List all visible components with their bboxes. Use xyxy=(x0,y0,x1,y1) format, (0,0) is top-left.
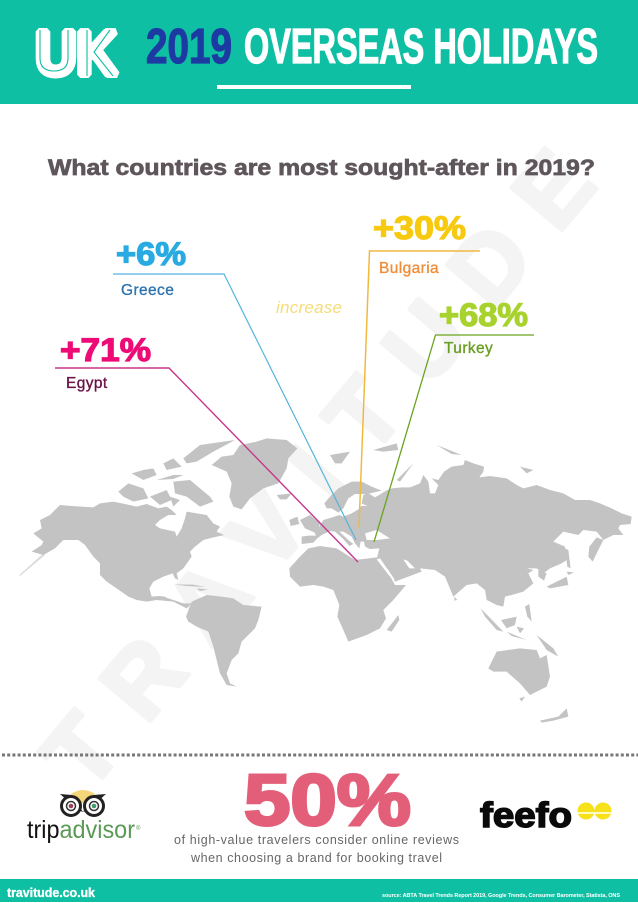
value: +6%: +6% xyxy=(116,236,186,272)
inland seas xyxy=(365,530,415,580)
label: Greece: Greece xyxy=(121,282,174,299)
value: +30%: +30% xyxy=(373,210,466,246)
logo: tripadvisor xyxy=(27,790,141,844)
map: Americas and Greenland xyxy=(19,438,297,687)
callout: Egypt xyxy=(55,332,358,562)
title year: 2019 xyxy=(146,20,232,74)
value: +68%: +68% xyxy=(439,297,528,333)
statistic description xyxy=(174,833,459,865)
statistic description: of high-value travelers consider online reviews xyxy=(174,833,459,847)
Africa xyxy=(289,546,406,642)
icon: owl xyxy=(60,790,106,816)
label: Turkey: Turkey xyxy=(444,340,493,357)
icon: yellow eyes xyxy=(577,802,612,820)
statistic description: when choosing a brand for booking travel xyxy=(190,851,442,865)
logo: feefo xyxy=(480,796,612,835)
statistic: 50%: 50% xyxy=(244,761,411,841)
title underline xyxy=(217,85,411,89)
question heading: What countries are most sought-after in 2019? xyxy=(48,155,595,180)
footer bar xyxy=(0,879,638,902)
callout: Turkey xyxy=(374,297,534,542)
UK logo: UK xyxy=(36,20,118,88)
website: travitude.co.uk xyxy=(7,886,95,900)
callout: Greece xyxy=(113,236,356,540)
watermark: TRAVITUDE: TRAVITUDE xyxy=(22,131,615,808)
caption: increase: increase xyxy=(276,298,342,317)
wordmark: feefo xyxy=(480,796,572,835)
value: +71%: +71% xyxy=(60,332,151,368)
wordmark: tripadvisor xyxy=(27,816,135,844)
label: Egypt: Egypt xyxy=(66,375,108,392)
callout: Bulgaria xyxy=(359,210,480,527)
world map xyxy=(19,438,632,723)
logo: tripadvisor: ® xyxy=(136,825,141,832)
map: Eurasia, Africa, Oceania xyxy=(289,443,632,723)
label: Bulgaria: Bulgaria xyxy=(379,260,439,277)
source note: source: ABTA Travel Trends Report 2019, Google Trends, Consumer Barometer, Statista, ONS xyxy=(382,893,620,899)
header banner xyxy=(0,0,638,104)
